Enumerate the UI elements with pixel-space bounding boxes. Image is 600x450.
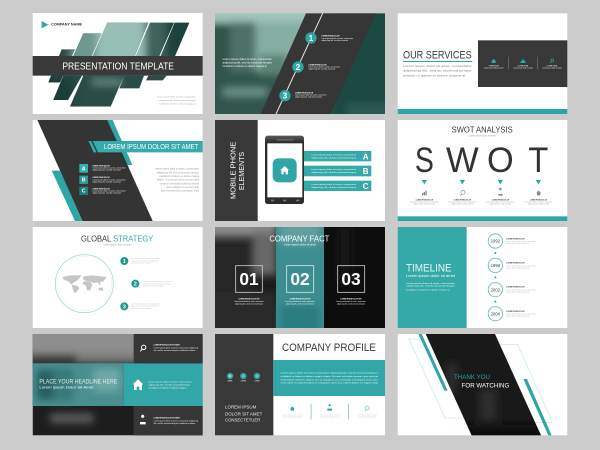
captions: adipiscing elit, sed do eiusmod (528, 203, 549, 206)
description text: incididunt ut labore et dolore magna al (159, 102, 196, 105)
side dots: LOREM (227, 381, 233, 383)
teal footer (398, 216, 567, 221)
panel text: Lorem ipsum dolor sit amet, consectetur (406, 282, 455, 285)
title bar (33, 56, 203, 76)
service 1 (484, 59, 504, 69)
item C: LOREM IPSUM DOLOR (92, 188, 110, 190)
teal icon band (124, 363, 203, 406)
captions: adipiscing elit, sed do eiusmod (490, 203, 511, 206)
dark bottom block (134, 406, 203, 435)
year 2002 (488, 282, 536, 297)
top block text: elit, sed do eiusmod tempor incididunt ut labore (154, 349, 195, 352)
side dots (227, 373, 260, 383)
icon: search (460, 190, 465, 196)
option C (304, 181, 371, 191)
for watching: FOR WATCHING (462, 382, 509, 389)
SWOT letters: T (528, 141, 548, 180)
right body text: nisi ut aliquip ex ea commodo (166, 186, 200, 189)
slide 6: SWOT analysis (398, 120, 567, 221)
item B: B (82, 178, 86, 184)
captions: adipiscing elit, sed do eiusmod (414, 203, 435, 206)
item B: Lorem ipsum dolor sit amet, consectetur (92, 178, 126, 181)
icon: person (498, 188, 503, 196)
fact 02: LOREM IPSUM DOLOR SIT (289, 298, 311, 300)
service 2: LOREM IPSUM (518, 65, 529, 67)
strategy point 2 (131, 280, 173, 288)
slide 8: company fact (215, 227, 385, 328)
description text: Lorem ipsum dolor sit amet, consectetur (157, 96, 196, 99)
teal band: Lorem ipsum dolor sit amet, consectetur adipiscing elit, sed do eiusmod tempor i (281, 372, 379, 375)
connector dot (494, 252, 496, 254)
year 1998: 1998 (491, 263, 501, 268)
icon: chart (422, 191, 427, 195)
icon: person (327, 404, 332, 411)
panel text: incididunt ut labore et dolore magna al (406, 289, 450, 292)
option B: B (363, 167, 369, 176)
year 1992 (488, 234, 536, 248)
year 2002: 2002 (491, 287, 501, 292)
phone (265, 136, 304, 204)
dark top block (134, 334, 203, 363)
panel text: adipiscing elit, sed do eiusmod tempor (406, 285, 455, 288)
item C: Lorem ipsum dolor sit amet, consectetur (92, 190, 126, 193)
side title: ELEMENTS (237, 152, 246, 190)
icon captions (282, 413, 378, 419)
angled photo shards (48, 22, 190, 107)
slide 11: company profile (215, 334, 385, 435)
option A (304, 151, 371, 161)
step 1: adipiscing elit, sed do eiusmod (321, 39, 348, 42)
option C: C (363, 182, 369, 191)
right body text (155, 168, 200, 192)
body text: Lorem ipsum dolor sit amet, consectetur (403, 64, 472, 68)
SWOT letters: W (446, 141, 479, 180)
year 1992: LOREM IPSUM DOLOR (506, 238, 525, 240)
right body text: aliqua. Ut enim ad minim veniam, quis (157, 179, 200, 182)
item B: LOREM IPSUM DOLOR (92, 177, 110, 179)
fact 01: LOREM IPSUM DOLOR SIT (238, 298, 260, 300)
service 3: LOREM IPSUM (547, 65, 558, 67)
captions: Lorem ipsum dolor sit amet, consectetur (486, 201, 515, 204)
subheading: Lorem ipsum dolor sit amet (103, 244, 132, 247)
icon captions: Lorem ipsum dolor sit amet (282, 413, 303, 416)
year 2004: Lorem ipsum dolor sit amet, consectetur (506, 313, 536, 316)
option A: Lorem ipsum dolor sit amet, consectetur (311, 153, 357, 156)
icon captions: consectetur adipiscing elit (358, 416, 377, 419)
year 1998: LOREM IPSUM DOLOR (506, 263, 525, 265)
step 1: LOREM IPSUM DOLOR (321, 36, 340, 38)
service 2: Lorem ipsum dolor sit amet (513, 66, 533, 69)
background photo (215, 13, 385, 114)
world map (63, 275, 107, 293)
side dots: LOREM (254, 381, 260, 383)
icon: house (280, 166, 289, 174)
fact 03: 03 (341, 269, 361, 289)
service 1: LOREM IPSUM (488, 65, 500, 67)
side dots: LOREM (241, 381, 247, 383)
service 3: Lorem ipsum dolor sit amet (542, 66, 562, 69)
teal center column (276, 227, 324, 328)
fact 02 (285, 266, 315, 305)
year 2002: Lorem ipsum dolor sit amet, consectetur (506, 288, 536, 291)
heading: TIMELINE (406, 262, 452, 274)
teal panel (398, 227, 467, 328)
dark diagonal band (261, 13, 376, 114)
left caption: adipiscing elit, sed do eiusmod tempor (223, 61, 272, 64)
teal overlay band (33, 363, 124, 406)
timeline line (276, 13, 323, 114)
strategy point 2: incididunt ut labore et dolore (143, 285, 164, 288)
left outline (409, 339, 468, 418)
dark right column (324, 227, 385, 328)
bottom block text: LOREM IPSUM DOLOR SIT AMET (154, 417, 180, 420)
heading: COMPANY FACT (269, 234, 329, 243)
left caption (223, 58, 272, 68)
middle block text (148, 380, 192, 390)
icon captions: Lorem ipsum dolor sit amet (320, 413, 340, 416)
option B: Lorem ipsum dolor sit amet, consectetur (311, 168, 357, 171)
icon: house (536, 191, 541, 195)
captions: adipiscing elit, sed do eiusmod (452, 203, 473, 206)
dark diagonal panel (37, 120, 153, 221)
markers (422, 180, 541, 184)
item C: C (82, 189, 86, 195)
year 1992: Lorem ipsum dolor sit amet, consectetur (506, 240, 536, 243)
item B (79, 176, 126, 184)
item A: Lorem ipsum dolor sit amet, consectetur (92, 167, 126, 170)
heading: COMPANY PROFILE (282, 342, 376, 354)
right body text: incididunt ut labore et dolore magna (159, 175, 200, 178)
year 2004: LOREM IPSUM DOLOR (506, 311, 525, 313)
side caption: CONSECTETUER (225, 418, 261, 423)
captions: Lorem ipsum dolor sit amet, consectetur (410, 201, 439, 204)
heading: OUR SERVICES (403, 50, 472, 62)
background photo (215, 227, 385, 328)
top block text (154, 344, 198, 352)
panel text (406, 282, 455, 292)
captions: LOREM IPSUM DOLOR (492, 199, 510, 201)
dark side panel (215, 334, 273, 435)
year 1998: adipiscing elit, sed do eiusmod (506, 266, 529, 269)
thank you: THANK YOU (454, 374, 490, 381)
left caption: Lorem ipsum dolor sit amet, consectetur (223, 58, 272, 61)
step 3: 3 (283, 91, 288, 101)
step 3 (279, 90, 327, 101)
icon: person (140, 415, 146, 424)
fact 01: Lorem ipsum dolor sit amet, consectetur (234, 300, 264, 303)
item C (79, 187, 126, 195)
step 2: 2 (296, 62, 301, 72)
strategy point 2: Lorem ipsum dolor sit amet, consectetur (143, 280, 173, 283)
service 2 (513, 59, 533, 69)
strategy point 2: 2 (134, 282, 137, 288)
body text (403, 64, 472, 77)
strategy point 3: incididunt ut labore et dolore (131, 307, 152, 310)
subheading: Lorem ipsum dolor sit amet (468, 134, 497, 137)
teal footer (398, 109, 567, 114)
company name: COMPANY NAME (51, 23, 83, 27)
side panel (215, 120, 258, 221)
item A: A (82, 166, 86, 172)
year 1998: Lorem ipsum dolor sit amet, consectetur (506, 264, 536, 267)
icon captions: consectetur adipiscing elit (320, 416, 340, 419)
strategy point 1: incididunt ut labore et dolore (131, 262, 152, 265)
services panel (478, 40, 567, 87)
middle block text: adipiscing elit, sed do eiusmod tempor (148, 383, 191, 386)
fact 02: 02 (290, 269, 310, 289)
teal band: ncididunt ut labore et dolore magna aliqua. Ut enim ad minim veniam, quis nostrud (281, 375, 378, 378)
slide 5: mobile phone elements (215, 120, 385, 221)
side caption: DOLOR SIT AMET (225, 411, 263, 416)
fact 03: Lorem ipsum dolor sit amet, consectetur (336, 300, 366, 303)
strategy point 1: adipiscing elit, sed do eiusmod tempor (131, 259, 159, 262)
SWOT letters: S (415, 141, 434, 180)
right body text: Lorem ipsum dolor sit amet, consectetur (155, 168, 199, 171)
strategy point 1: 1 (123, 259, 126, 265)
bottom block text: elit, sed do eiusmod tempor incididunt ut labore (154, 422, 195, 425)
option A: A (363, 152, 369, 161)
service 3 (542, 59, 562, 69)
item B: adipiscing elit, sed do eiusmod (92, 180, 121, 183)
fact 03: LOREM IPSUM DOLOR SIT (340, 298, 362, 300)
icon: house (290, 406, 295, 411)
heading: GLOBAL STRATEGY (81, 233, 154, 243)
icon captions: consectetur adipiscing elit (283, 416, 302, 419)
description text (157, 96, 196, 105)
option B (304, 166, 371, 176)
step 3: LOREM IPSUM DOLOR (295, 93, 314, 95)
fact 03 (336, 266, 366, 305)
subheading: Lorem ipsum dolor sit amet (406, 273, 456, 278)
SWOT letters (415, 141, 548, 180)
background photo (32, 334, 203, 436)
step 3: Lorem ipsum dolor sit amet, consectetur (295, 94, 327, 97)
teal band (273, 360, 385, 396)
item A: adipiscing elit, sed do eiusmod (92, 169, 121, 172)
strategy point 3: adipiscing elit, sed do eiusmod tempor (131, 305, 159, 308)
option C: Lorem ipsum dolor sit amet, consectetur (311, 183, 357, 186)
app icon (273, 158, 297, 182)
step 1: Lorem ipsum dolor sit amet, consectetur (321, 37, 353, 40)
bottom block text: Lorem ipsum dolor sit amet, consectetur adipiscing (154, 419, 198, 422)
strategy point 1: Lorem ipsum dolor sit amet, consectetur (131, 257, 161, 260)
black diagonal photo (426, 334, 541, 436)
left caption: incididunt ut labore et dolore magna al (223, 65, 267, 68)
teal band: irure dolor in reprehenderit in voluptate velit esse cillum dolore eu fugiat nulla (281, 382, 380, 385)
divider (310, 404, 312, 419)
fact 01: 01 (239, 269, 259, 289)
item A: LOREM IPSUM DOLOR (92, 165, 110, 167)
captions: LOREM IPSUM DOLOR (416, 199, 434, 201)
step 1 (305, 32, 353, 44)
divider (347, 404, 350, 419)
top block text: LOREM IPSUM DOLOR SIT AMET (154, 344, 180, 347)
item A (79, 164, 126, 173)
fact 01 (234, 266, 264, 305)
year 2004 (488, 306, 536, 321)
strategy point 3 (120, 302, 161, 310)
year 2004: 2004 (491, 311, 501, 316)
globe map (55, 255, 113, 313)
body text: eiiidunt ut labore et dolore magna al (403, 73, 465, 77)
step 1: 1 (309, 33, 314, 43)
body text: adipiscing elit, sed do eiusmod tempor (403, 69, 472, 73)
captions: Lorem ipsum dolor sit amet, consectetur (524, 201, 553, 204)
option B: adipiscing elit, sed do eiusmod tempor (311, 171, 357, 174)
slide 7: global strategy (33, 227, 203, 328)
captions: Lorem ipsum dolor sit amet, consectetur (448, 201, 477, 204)
slide 12: thank you (398, 334, 567, 445)
right teal stripe (523, 379, 552, 435)
year 1998 (488, 258, 536, 272)
title: PRESENTATION TEMPLATE (62, 62, 174, 73)
top block text: Lorem ipsum dolor sit amet, consectetur adipiscing (154, 346, 198, 349)
strategy point 3: Lorem ipsum dolor sit amet, consectetur (131, 302, 161, 305)
step 2 (292, 61, 340, 73)
upper teal stripe (107, 120, 132, 165)
subheadline: Lorem Ipsum Dolor Sit Amet (39, 385, 94, 390)
bottom block text (154, 417, 198, 425)
left teal stripe (418, 334, 448, 391)
description text: adipiscing elit, sed do eiusmod tempor (159, 99, 196, 102)
teal band: exercitation ullamco laboris nisi ut aliquip ex ea commodo consequat. Duis aute (281, 378, 378, 381)
icon captions: Lorem ipsum dolor sit amet (357, 413, 378, 416)
slide 2: numbered list on photo (215, 13, 385, 114)
right outline (492, 344, 552, 422)
side caption: LOREM IPSUM (225, 405, 257, 410)
banner title: LOREM IPSUM DOLOR SIT AMET (104, 144, 199, 151)
slide 3: our services (398, 13, 567, 114)
icon: house (133, 379, 143, 390)
strategy point 2: adipiscing elit, sed do eiusmod tempor (143, 282, 172, 285)
option A: adipiscing elit, sed do eiusmod tempor (311, 156, 357, 159)
captions: LOREM IPSUM DOLOR (530, 199, 548, 201)
option C: adipiscing elit, sed do eiusmod tempor (311, 186, 357, 189)
item C: adipiscing elit, sed do eiusmod (92, 192, 121, 195)
service 1: Lorem ipsum dolor sit amet (484, 66, 504, 69)
SWOT letters: O (487, 141, 514, 180)
slide 9: timeline (398, 227, 567, 328)
year 1992: 1992 (491, 239, 501, 244)
heading underline (403, 60, 472, 63)
icon: search (365, 406, 369, 411)
year 1992: adipiscing elit, sed do eiusmod (506, 242, 529, 245)
step 3: adipiscing elit, sed do eiusmod (295, 96, 322, 99)
connector dot (494, 301, 496, 303)
heading: SWOT ANALYSIS (452, 124, 513, 134)
captions: LOREM IPSUM DOLOR (454, 199, 472, 201)
captions (410, 199, 553, 206)
fact 01: adipiscing elit, sed do eiusmod tempor (235, 302, 264, 305)
logo triangle (42, 21, 48, 28)
subheading: Lorem ipsum dolor sit amet (284, 243, 316, 247)
side title: MOBILE PHONE (229, 142, 238, 199)
year 2002: adipiscing elit, sed do eiusmod (506, 290, 529, 293)
middle block text: Lorem ipsum dolor sit amet, consectetur (148, 380, 192, 383)
fact 02: Lorem ipsum dolor sit amet, consectetur (285, 300, 315, 303)
lower teal stripe (52, 171, 83, 221)
teal banner (88, 141, 203, 152)
icon: search (140, 345, 146, 351)
slide 1: presentation template cover (32, 13, 203, 114)
connector dot (494, 276, 496, 278)
year 2004: adipiscing elit, sed do eiusmod (506, 315, 529, 318)
right body text: adipiscing elit, sed do eiusmod tempor (157, 171, 199, 174)
headline: PLACE YOUR HEADLINE HERE (39, 380, 117, 386)
side title (229, 142, 246, 199)
right body text: ipsa ea commodo consequat. Duis (161, 189, 200, 192)
step 2: LOREM IPSUM DOLOR (308, 64, 327, 66)
middle block text: incididunt ut labore et dolore magna (148, 387, 188, 390)
right body text: nostrud exercitation ullamco laboris (160, 182, 200, 185)
step 2: Lorem ipsum dolor sit amet, consectetur (308, 66, 340, 69)
strategy point 1 (120, 257, 161, 265)
slide 4: lorem ipsum diagonal (33, 120, 203, 221)
fact 03: adipiscing elit, sed do eiusmod tempor (337, 302, 366, 305)
strategy point 3: 3 (123, 304, 126, 310)
step 2: adipiscing elit, sed do eiusmod (308, 68, 335, 71)
slide 10: place your headline (32, 334, 203, 436)
year 2002: LOREM IPSUM DOLOR (506, 287, 525, 289)
fact 02: adipiscing elit, sed do eiusmod tempor (286, 302, 315, 305)
side caption (225, 405, 263, 423)
